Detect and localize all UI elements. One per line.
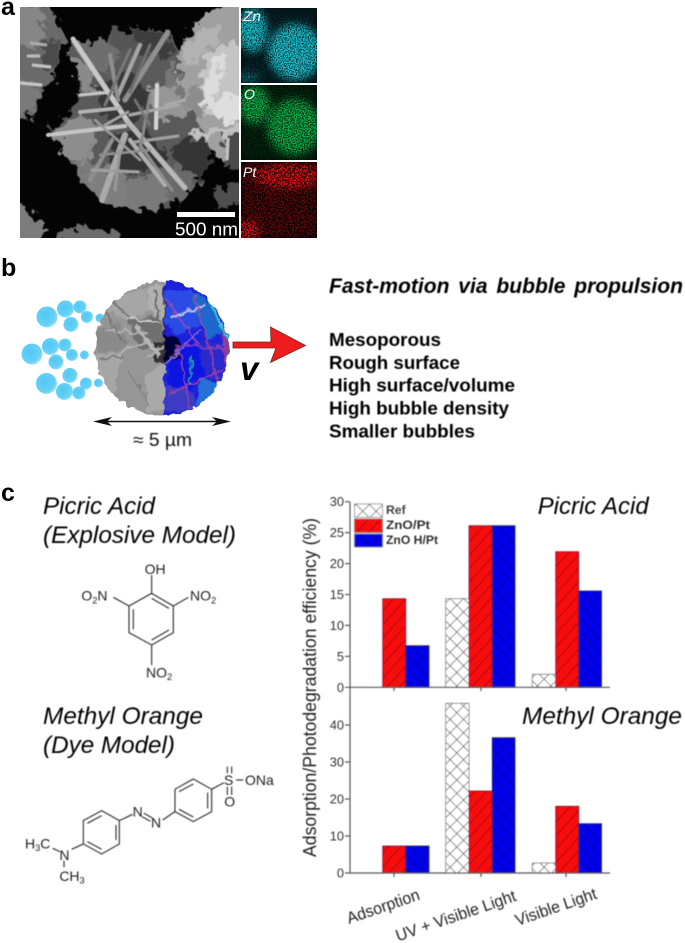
structure: picric acid: O <box>81 588 92 604</box>
structure: methyl orange: S <box>224 772 233 788</box>
chart legend: Ref <box>386 503 407 517</box>
category labels: Adsorption <box>344 886 422 928</box>
panel a: O map <box>238 85 321 160</box>
heading: methyl orange: Methyl Orange <box>43 703 203 730</box>
property list <box>329 329 515 442</box>
methyl orange tick labels: 40 <box>330 718 344 732</box>
panel b: micromotor sphere <box>90 280 234 416</box>
picric tick labels: 25 <box>330 525 344 540</box>
needles <box>48 32 185 200</box>
size double arrow <box>93 417 231 426</box>
panel b: bubbles <box>22 300 104 400</box>
methyl orange tick labels: 30 <box>330 754 344 770</box>
structure: picric acid: OH <box>145 561 166 577</box>
chart y-axis title: Adsorption/Photodegradation efficiency (%) <box>299 518 320 857</box>
panel a: O map: O <box>244 86 255 102</box>
structure: methyl orange: C <box>40 835 50 851</box>
central flower body <box>50 29 212 212</box>
structure: picric acid <box>81 561 216 682</box>
structure: picric acid: NO <box>190 588 211 604</box>
property list: Rough surface <box>329 352 460 373</box>
heading: picric acid: Picric Acid <box>43 493 156 520</box>
heading: picric acid <box>43 493 236 549</box>
chart legend: ZnO/Pt <box>386 518 430 532</box>
picric axes <box>345 502 610 873</box>
property list: Mesoporous <box>329 329 441 350</box>
panel a: Pt map: Pt <box>243 164 257 180</box>
picric tick labels: 5 <box>337 649 344 664</box>
scale bar: 500 nm <box>175 218 238 240</box>
panel a: Zn map <box>241 8 317 83</box>
chart title: methyl orange: Methyl Orange <box>522 703 682 730</box>
property list: Smaller bubbles <box>329 420 475 442</box>
structure: methyl orange: ONa <box>245 772 274 788</box>
structure: picric acid: N <box>97 588 108 604</box>
structure: methyl orange: O <box>224 794 235 810</box>
chart: picric acid bars <box>330 494 610 873</box>
grey half petals <box>92 285 165 412</box>
structure: methyl orange: N <box>133 804 143 820</box>
heading: methyl orange <box>43 703 203 759</box>
property list: High surface/volume <box>329 374 515 396</box>
picric tick labels <box>330 494 344 695</box>
heading: fast-motion: Fast-motion via bubble propulsion <box>329 275 683 298</box>
chart: methyl orange bars <box>330 703 610 880</box>
chart title: picric acid: Picric Acid <box>538 493 650 520</box>
methyl orange tick labels: 20 <box>330 792 344 806</box>
size label: ≈ 5 µm <box>133 430 192 450</box>
property list: High bubble density <box>329 398 510 418</box>
structure: picric acid: 2 <box>167 672 172 682</box>
structure: methyl orange: 3 <box>80 876 85 886</box>
structure: methyl orange: CH <box>59 868 80 884</box>
heading: picric acid: (Explosive Model) <box>43 522 236 549</box>
methyl orange tick labels: 0 <box>337 866 344 880</box>
category labels <box>344 885 600 943</box>
chart legend: ZnO H/Pt <box>386 533 438 547</box>
blue half petals <box>164 286 230 412</box>
methyl orange axes <box>345 725 610 877</box>
top-left flower <box>14 2 63 122</box>
panel b: velocity arrow <box>233 327 306 362</box>
category labels: Visible Light <box>513 885 600 930</box>
panel a: SEM micrograph <box>20 7 239 238</box>
picric tick labels: 10 <box>330 618 344 633</box>
label b: b <box>1 254 16 282</box>
panel a: Zn map: Zn <box>242 8 261 24</box>
bottom fragments <box>20 182 239 238</box>
picric tick labels: 15 <box>330 587 344 602</box>
methyl orange tick labels <box>330 718 344 880</box>
structure: methyl orange <box>25 767 274 886</box>
chart legend <box>354 503 438 547</box>
right flower <box>172 7 239 170</box>
label v: v <box>240 350 260 387</box>
structure: methyl orange: N <box>59 847 69 863</box>
scale bar <box>176 212 237 236</box>
structure: picric acid: 2 <box>211 595 216 605</box>
picric tick labels: 0 <box>337 680 344 695</box>
picric tick labels: 20 <box>330 556 344 571</box>
heading: methyl orange: (Dye Model) <box>43 732 175 759</box>
panel a: Pt map <box>241 162 317 238</box>
structure: picric acid: NO <box>146 664 167 680</box>
structure: methyl orange: H <box>25 835 35 851</box>
structure: picric acid: 2 <box>92 595 97 605</box>
structure: methyl orange: 3 <box>35 843 40 853</box>
methyl orange tick labels: 10 <box>330 828 344 844</box>
structure: methyl orange: N <box>151 814 161 830</box>
label c: c <box>1 479 15 507</box>
picric tick labels: 30 <box>330 494 344 509</box>
